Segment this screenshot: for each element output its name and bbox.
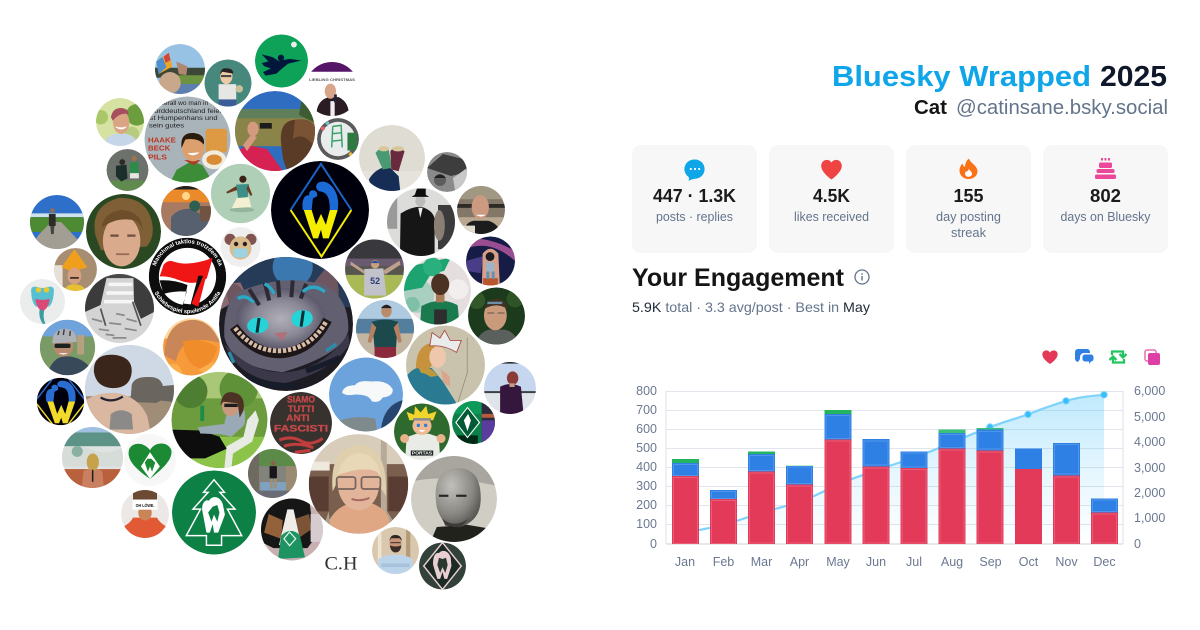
avatar: small street photo — [248, 449, 297, 498]
avatar: woman in ocean waves — [62, 427, 123, 488]
icon: flame — [960, 158, 978, 179]
stat card: days on Bluesky: days on Bluesky — [1060, 210, 1151, 224]
left axis labels — [636, 384, 657, 551]
avatar: Haake Beck Pils poster: PILS — [148, 152, 167, 161]
left axis labels: 0 — [650, 537, 657, 551]
avatar: Haake Beck Pils poster — [144, 96, 230, 182]
avatar: player in stadium number 52: 52 — [370, 276, 380, 286]
avatar: green tower drawing — [317, 118, 359, 160]
right axis labels: 0 — [1134, 537, 1141, 551]
icon: reposts — [1110, 352, 1126, 362]
bar: May — [824, 410, 852, 544]
month labels: Jan — [675, 555, 695, 569]
engagement summary: 5.9K total · 3.3 avg/post · Best in May — [632, 299, 870, 315]
avatar: greyscale photo — [427, 152, 467, 192]
left axis labels: 800 — [636, 384, 657, 398]
avatar: medieval queen illustration — [406, 326, 485, 404]
avatar: Haake Beck Pils poster: überall wo man in — [157, 101, 208, 107]
avatar: football players — [106, 149, 148, 191]
avatar: cyclist on a road — [30, 195, 84, 249]
right axis labels: 1,000 — [1134, 511, 1165, 525]
month labels: Jul — [906, 555, 922, 569]
month labels: Aug — [941, 555, 963, 569]
avatar: man with sunglasses on head — [468, 288, 525, 344]
right axis labels: 3,000 — [1134, 461, 1165, 475]
avatar: person in red hoodie: OH LÖWE. — [136, 503, 154, 508]
avatar: green heart with Werder logo — [124, 434, 176, 486]
avatar: smiling man with record shelf — [457, 186, 505, 234]
avatar: Werder logo and concert split — [452, 401, 497, 444]
avatar: Antifa flags ring: Manchmal taktlos trotzdem da — [152, 239, 222, 266]
stat card: posts and replies: posts · replies — [656, 210, 733, 224]
month labels: Sep — [979, 555, 1002, 569]
bar: Sep — [976, 428, 1004, 544]
bar: Jul — [900, 452, 928, 544]
left axis labels: 500 — [636, 441, 657, 455]
avatar: stadium with rainbow flag — [155, 44, 205, 94]
stat card: posts and replies — [632, 145, 757, 253]
avatar: smiling man in cap — [96, 98, 144, 146]
bar: Apr — [786, 466, 813, 544]
avatar: cyclist with helmet — [40, 320, 95, 375]
avatar: kneeling player illustration — [211, 164, 270, 223]
stat card: days on Bluesky: 802 — [1090, 186, 1121, 206]
avatar: cartoon man — [204, 60, 252, 106]
heading: Your Engagement: Your Engagement — [632, 264, 845, 292]
bar: Nov — [1053, 443, 1080, 544]
avatar: robot in space — [466, 236, 515, 286]
right axis labels: 6,000 — [1134, 384, 1165, 398]
avatar: greyscale bald man — [411, 456, 497, 542]
month labels: Oct — [1019, 555, 1039, 569]
avatar: woman relaxing in chair — [172, 370, 268, 468]
month labels: May — [826, 555, 851, 569]
bar: Feb — [710, 490, 737, 544]
stat card: day posting streak: streak — [951, 226, 987, 240]
avatar: Antifa flags ring: Schiebespiel spielende Antifa — [154, 291, 220, 314]
left axis labels: 400 — [636, 460, 657, 474]
avatar: Siamo tutti antifascisti graffiti — [270, 392, 332, 454]
avatar: Haake Beck Pils poster: sein gutes — [149, 123, 184, 129]
avatar: woman with elephants and tattoo — [85, 345, 174, 434]
avatar: sunset with man — [161, 186, 211, 236]
line points — [987, 392, 1107, 430]
left axis labels: 200 — [636, 498, 657, 512]
legend: engagement types — [1042, 349, 1160, 365]
avatar: curly-haired man — [86, 194, 161, 269]
month labels: Dec — [1093, 555, 1116, 569]
avatar: Haake Beck Pils poster: BECK — [148, 144, 171, 153]
avatar: person in red hoodie — [121, 490, 169, 538]
avatar: Antifa flags ring — [148, 238, 226, 316]
bar: Jun — [862, 439, 890, 544]
title: Bluesky Wrapped 2025: Bluesky Wrapped — [832, 61, 1091, 93]
avatar: Siamo tutti antifascisti graffiti: SIAMO — [287, 395, 315, 405]
avatar: man with cheese hat — [54, 248, 97, 291]
avatar: blue sky with cloud — [329, 358, 403, 432]
stat card: day posting streak: 155 — [954, 186, 984, 206]
avatar: Siamo tutti antifascisti graffiti: FASCISTI — [274, 424, 328, 434]
user name and handle: @catinsane.bsky.social — [956, 97, 1168, 119]
avatar: dark Werder logo — [419, 542, 466, 590]
avatar: person in green smoke — [401, 258, 471, 324]
stacked bars — [672, 410, 1118, 544]
avatar: woman photographing — [235, 91, 315, 171]
avatar: Siamo tutti antifascisti graffiti: ANTI — [286, 413, 310, 423]
avatar: small Ukraine Werder logo — [37, 378, 84, 425]
avatar: C.H initials logo: C.H — [324, 554, 358, 574]
stat card: day posting streak — [906, 145, 1031, 253]
left axis labels: 600 — [636, 422, 657, 436]
avatar: monochrome stairs — [85, 274, 154, 343]
avatar: man with crossed arms — [372, 527, 419, 574]
icon: likes heart — [1042, 350, 1058, 364]
icon: info — [855, 270, 869, 284]
bar: Oct — [1015, 448, 1042, 544]
month labels: Nov — [1055, 555, 1078, 569]
line: cumulative total — [685, 395, 1104, 533]
area: cumulative total — [685, 395, 1104, 544]
right axis labels: 2,000 — [1134, 486, 1165, 500]
left axis labels: 300 — [636, 479, 657, 493]
user name and handle: Cat — [914, 97, 947, 119]
avatar: logo and man with microphone — [309, 62, 355, 116]
icon: quotes — [1145, 350, 1160, 365]
avatar cluster — [20, 34, 536, 590]
month labels: Apr — [790, 555, 809, 569]
avatar: orange-toned woman in hat — [163, 318, 220, 376]
avatar: Haake Beck Pils poster: ist Humpenhans und — [148, 116, 218, 122]
avatar: older woman with glasses — [309, 434, 408, 534]
avatar: hamster with face mask — [220, 227, 260, 267]
month labels: Feb — [713, 555, 734, 569]
chart: monthly engagement — [636, 384, 1165, 569]
bar: Jan — [672, 459, 699, 544]
icon: heart — [821, 160, 842, 180]
right axis labels: 4,000 — [1134, 435, 1165, 449]
stat card: likes received — [769, 145, 894, 253]
stat card: days on Bluesky — [1043, 145, 1168, 253]
avatar: Siamo tutti antifascisti graffiti: TUTTI — [288, 404, 314, 414]
grid lines — [666, 391, 1123, 544]
avatar: Haake Beck Pils poster: HAAKE — [148, 136, 176, 145]
stat card: likes received: 4.5K — [813, 186, 850, 206]
avatar: C.H initials logo — [319, 541, 363, 585]
avatar: man in bowler hat — [387, 188, 455, 256]
avatar: player in stadium number 52 — [345, 240, 404, 298]
avatar: Werder logo in Ukraine colours — [271, 161, 369, 259]
avatar: Naruto in Gladbach jersey: PORTAS — [412, 451, 432, 457]
avatar: feet with sneakers — [359, 125, 425, 191]
left axis labels: 700 — [636, 403, 657, 417]
avatar: man on beach — [356, 300, 414, 358]
icon: replies — [1075, 349, 1094, 364]
stat card: day posting streak: day posting — [936, 210, 1001, 224]
right axis labels: 5,000 — [1134, 410, 1165, 424]
avatar: green goalkeeper — [255, 34, 308, 88]
month labels: Jun — [866, 555, 886, 569]
left axis labels: 100 — [636, 517, 657, 531]
stat card: likes received: likes received — [794, 210, 869, 224]
month labels — [675, 555, 1116, 569]
title: Bluesky Wrapped 2025: 2025 — [1100, 61, 1167, 93]
avatar: blue snake — [20, 279, 65, 324]
avatar: Cheshire cat — [219, 247, 353, 391]
bar: Aug — [938, 430, 966, 544]
avatar: Haake Beck Pils poster: Norddeutschland feiern — [149, 109, 226, 115]
avatar: Naruto in Gladbach jersey — [394, 404, 450, 460]
bar: Dec — [1091, 498, 1118, 544]
month labels: Mar — [751, 555, 772, 569]
avatar: woman looking at horizon — [484, 362, 536, 414]
stat card: posts and replies: 447 · 1.3K — [653, 186, 736, 206]
bar: Mar — [748, 452, 775, 544]
right axis labels — [1134, 384, 1165, 551]
avatar: green tree with Werder W — [172, 470, 256, 554]
icon: chat bubble — [684, 159, 705, 181]
avatar: logo and man with microphone: LIEBLING CHRISTMAS — [309, 77, 355, 82]
avatar: dog with green mask — [261, 498, 323, 560]
icon: birthday cake — [1095, 158, 1116, 179]
